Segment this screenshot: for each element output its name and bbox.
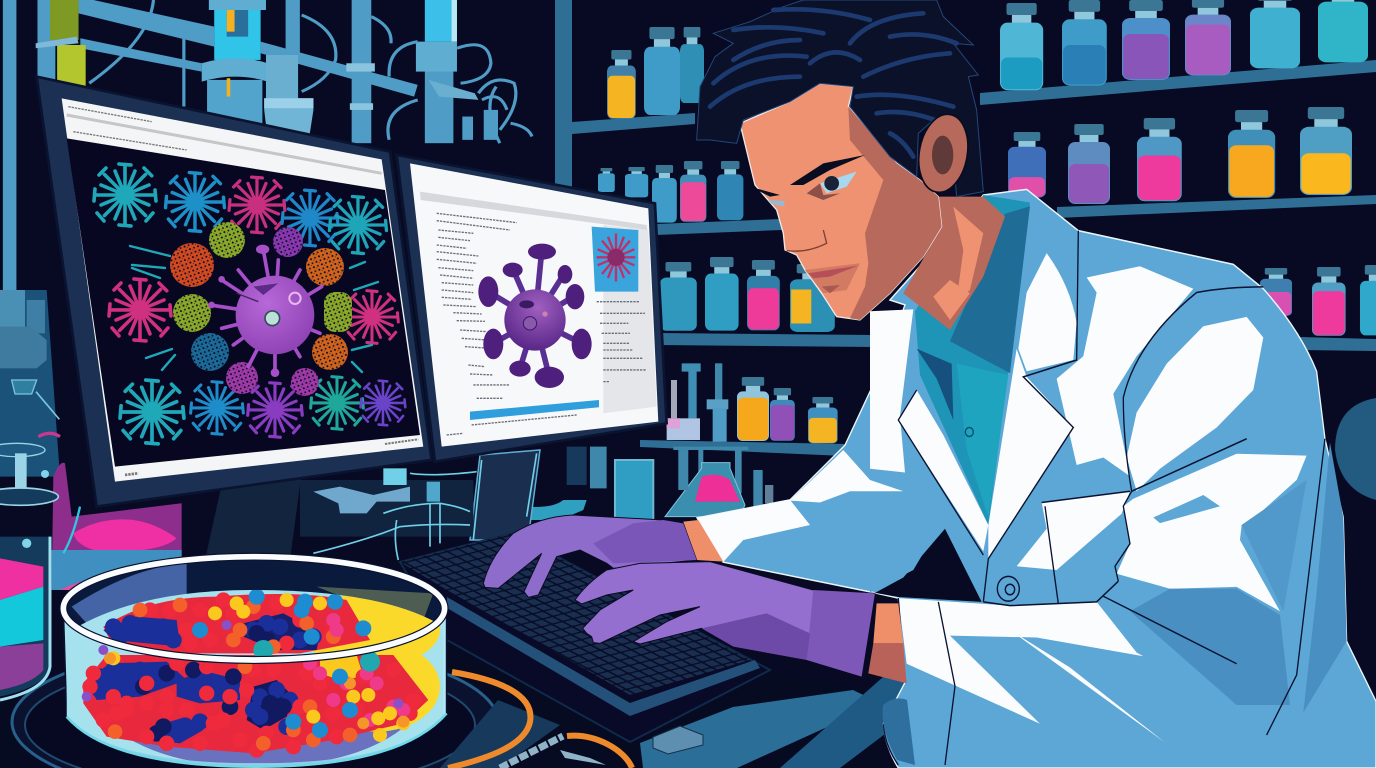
coat shading [870,401,1293,592]
central purple virus left screen [208,245,322,377]
blue progress bar [470,400,599,420]
apparatus head [0,327,47,368]
beaker [615,460,632,510]
hands [483,515,907,683]
flask [665,463,745,517]
monitor stand left [205,470,302,560]
bottles: second right row [1008,107,1352,204]
bottles: left upper shelf [607,27,704,119]
face [740,83,942,320]
shirt [915,195,1030,525]
toolbar band [420,192,647,230]
virus thumbnail [592,227,638,292]
monitor left white screen [62,98,423,482]
orange cables [448,672,632,768]
small beaker [527,447,688,522]
pink splash [52,463,182,590]
neck [903,197,1005,330]
front glove [575,562,875,677]
back glove [483,515,697,597]
monitor right frame [397,155,667,462]
lab pipes top left [3,0,532,300]
ear [913,110,974,196]
side panel [603,225,657,413]
hair highlights [710,9,963,157]
desk and mat [0,620,930,768]
apparatus backdrop [0,290,60,477]
grey cable [500,736,563,768]
monitor left [37,77,432,507]
gap between arm and torso [875,529,982,602]
monitor stand right [470,450,540,540]
lab glassware behind monitor [615,363,773,517]
petri dish [0,537,447,767]
bottom edge highlight [67,713,447,767]
dish body [63,612,447,767]
monitor right [397,155,667,462]
face shadow [848,107,942,320]
hair [697,0,983,197]
lab coat [697,189,1376,768]
keyboard [400,533,770,742]
left beaker [0,537,50,700]
bottles: bottom shelf [737,377,838,443]
eyes and brows [750,155,865,207]
back wrist [683,520,723,562]
neck, face and hair [697,0,1005,330]
keyboard front strip [447,597,760,716]
monitor left header text lines [67,107,418,475]
bench equipment [300,453,537,560]
shelves [572,60,1376,456]
virus grid on left screen [94,164,405,444]
coat whites [697,253,1307,742]
monitor right white screen [410,163,658,447]
document text lines [437,213,647,435]
bottles: top right row [1000,0,1368,90]
coat line work [883,231,1325,765]
dish rim [63,557,445,660]
see-through interior [63,557,445,660]
purple virus right screen [478,244,592,388]
left lab apparatus [0,290,182,590]
colony masses [103,594,370,653]
front wrist [868,603,907,683]
shelf upright [555,0,572,205]
bottles: middle shelf [598,161,743,223]
monitor left frame [37,77,432,507]
small plug [560,726,703,765]
scientist [483,0,1376,768]
bottles: lower shelf [660,257,1376,336]
keyboard keys [400,533,750,695]
nose and mouth [787,230,858,293]
keyboard body [400,533,770,742]
column [0,290,25,330]
upper beaker [0,443,45,457]
cuff opening [883,698,915,765]
culture liquid with colonies [63,587,447,767]
monitor left black viewport [67,138,420,467]
chair back [1335,398,1376,500]
